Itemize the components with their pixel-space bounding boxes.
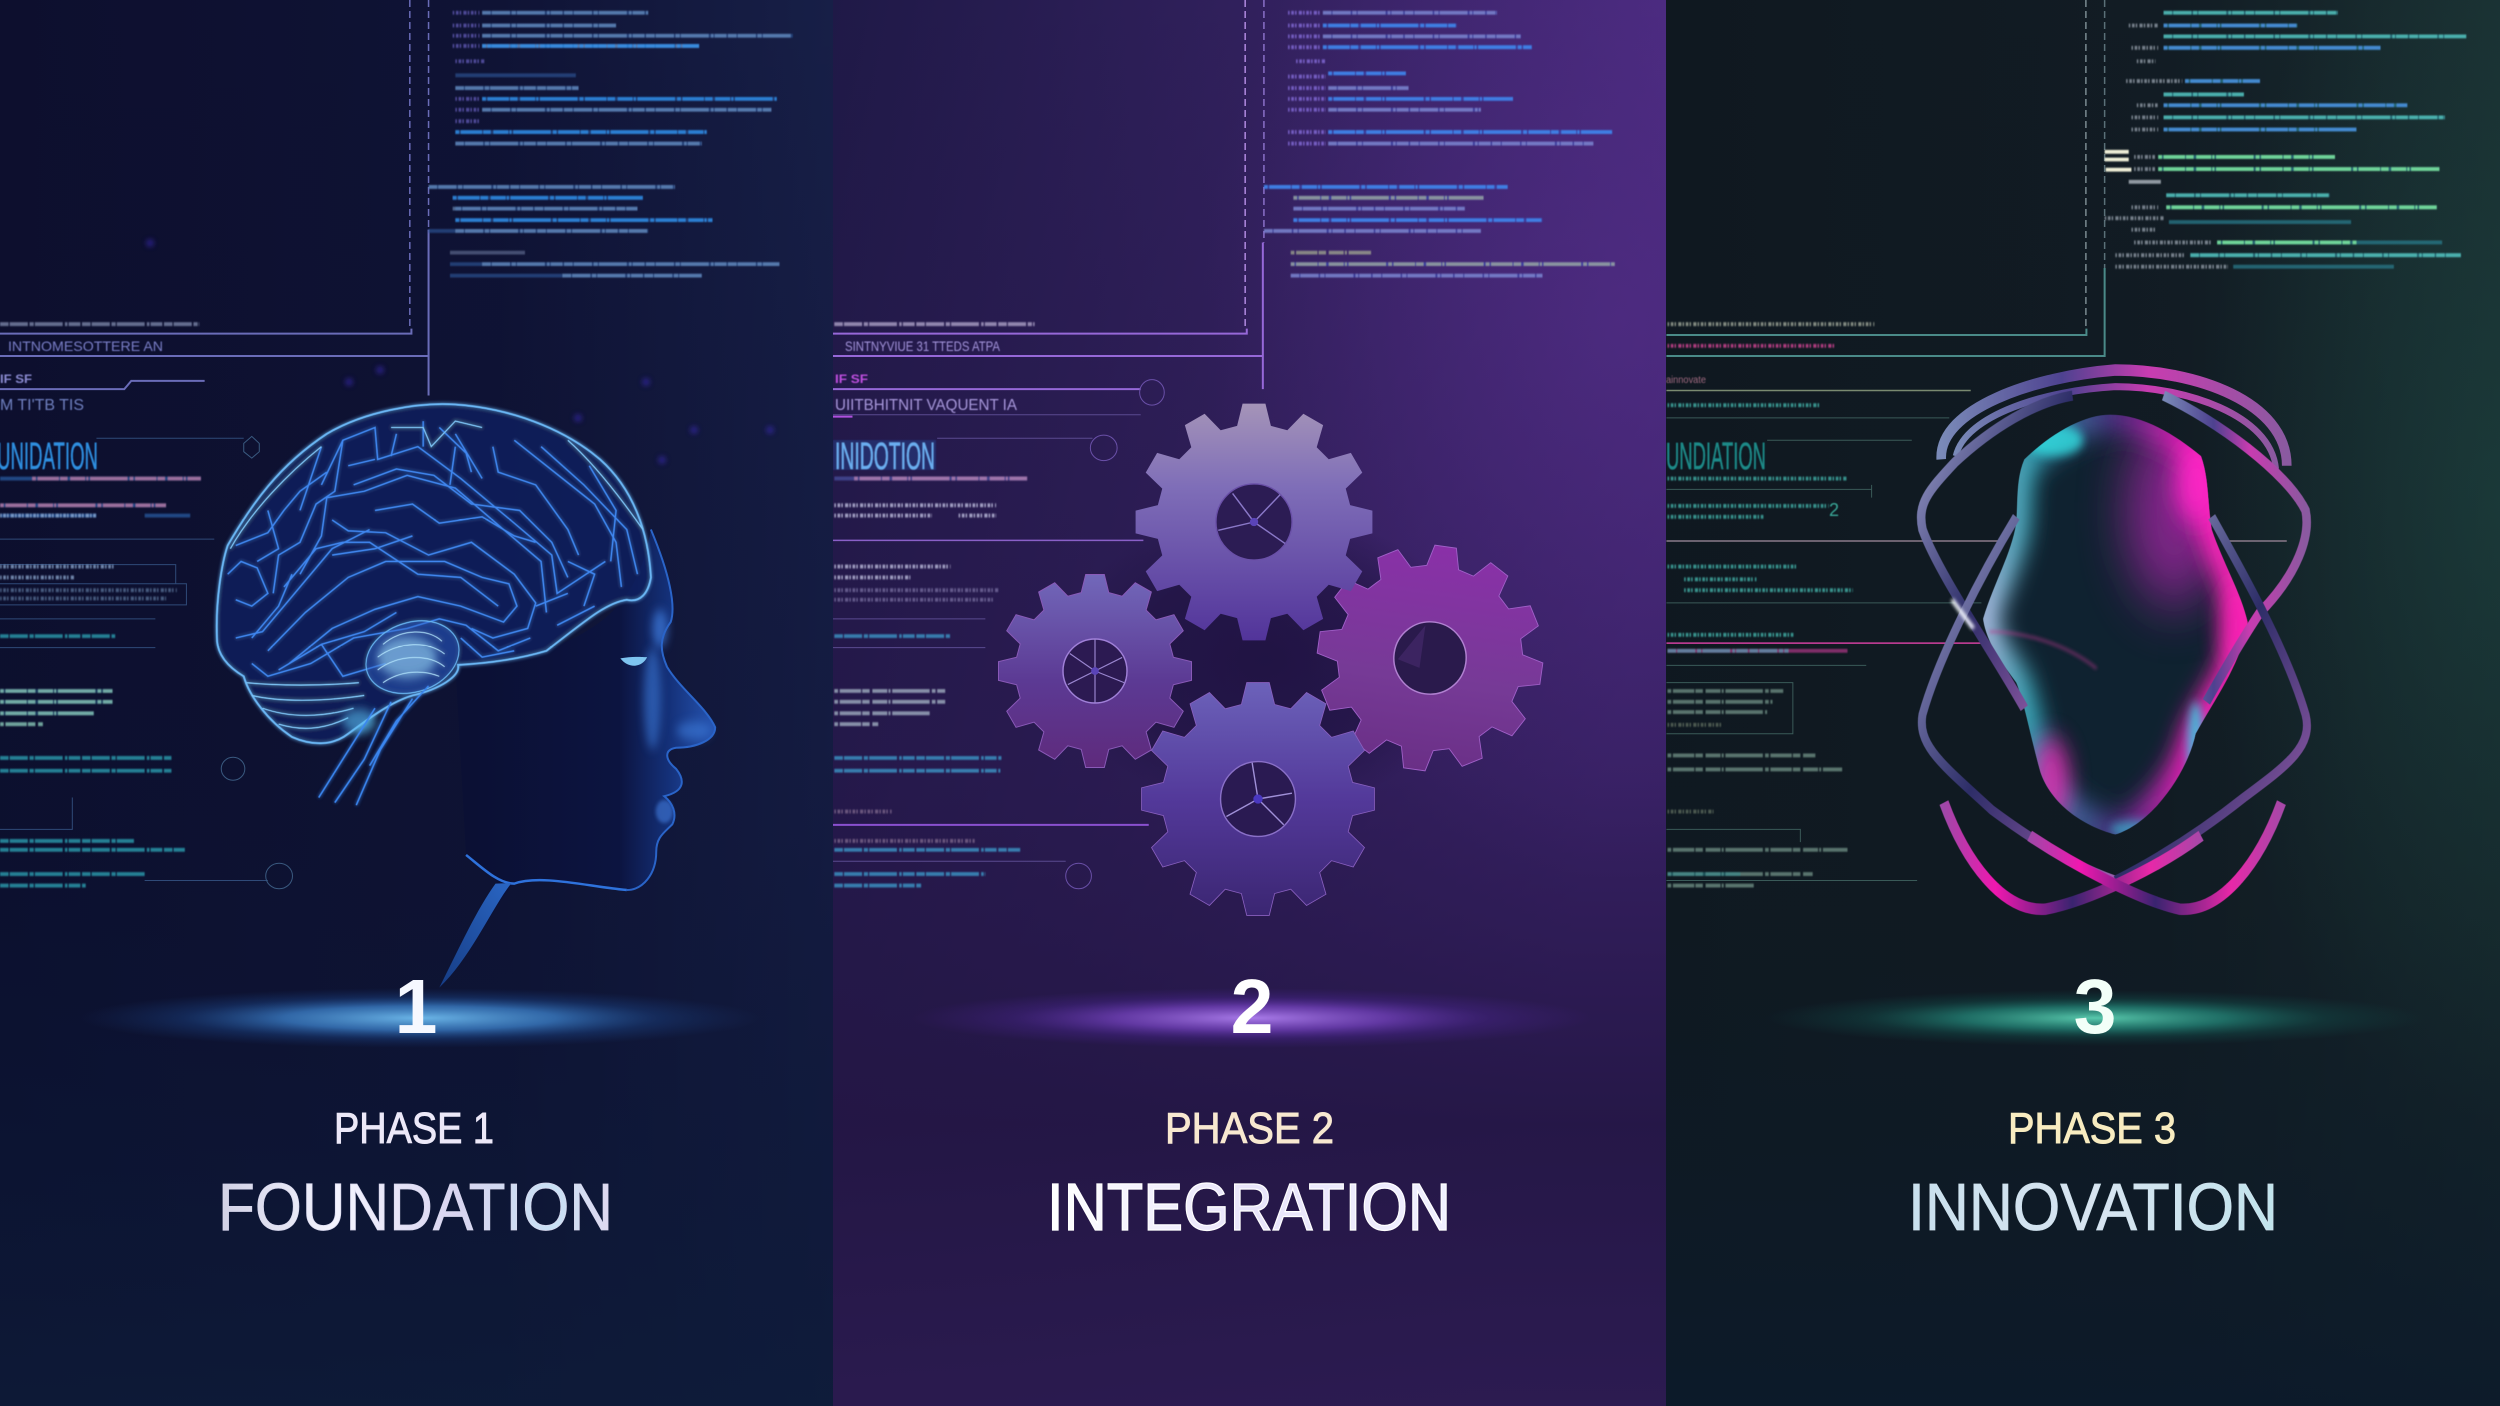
orbit rings behind orb [1941,370,2287,469]
panel: phase 2 integration [833,0,1666,1406]
code text streaks, left [0,324,201,886]
interface frame lines [1666,0,2287,880]
gear: left [998,574,1192,768]
numeral 1: 1 [395,964,437,1050]
code text streaks, top right [429,13,793,276]
numeral 2: 2 [1231,964,1273,1050]
title: innovation: INNOVATION [1908,1170,2278,1245]
interface labels: M TI'TB TIS [0,397,84,414]
orbit rings in front [1921,396,2307,909]
panel: phase 1 foundation [0,0,833,1406]
interface labels: INTNOMESOTTERE AN [8,338,163,354]
interface labels: ainnovate [1666,375,1706,386]
icon: head in profile with glowing brain [217,404,715,988]
title: integration: INTEGRATION [1047,1170,1451,1245]
phase label 3: PHASE 3 [2008,1104,2176,1153]
title: foundation: FOUNDATION [218,1170,613,1245]
interface labels [0,338,163,478]
base glow: phase 2 [912,988,1592,1048]
interface frame lines [0,0,429,889]
interface frame lines [833,0,1264,889]
interface labels: IF SF [835,372,868,386]
gear: right [1316,544,1544,772]
code text streaks, top right [1264,13,1615,276]
panel: phase 3 innovation [1666,0,2500,1406]
base glow: phase 1 [108,990,729,1046]
code text streaks, left [1667,324,1874,886]
icon: liquid orb with orbit rings [1921,370,2307,909]
gear: top [1136,404,1372,640]
interface labels: INIDOTION [835,436,935,478]
code text streaks, left [834,324,1035,886]
phase label 2: PHASE 2 [1165,1104,1334,1153]
base glow: phase 3 [1765,990,2425,1046]
code text streaks, top right [2105,13,2466,267]
gear: bottom [1142,683,1374,915]
phase label 1: PHASE 1 [334,1104,494,1153]
particles [147,240,773,463]
interface labels: 2 [1829,500,1839,520]
interface labels [833,338,1017,478]
brain [217,404,651,805]
numeral 3: 3 [2074,964,2116,1050]
head silhouette [439,530,715,988]
interface labels: SINTNYVIUE 31 TTEDS ATPA [845,338,1001,354]
interface labels: UNIDATION [0,436,98,478]
shadow behind gears [1147,550,1388,756]
interface labels: IF SF [0,372,32,386]
interface labels: UNDIATION [1666,436,1766,478]
interface labels: UIITBHITNIT VAQUENT IA [835,397,1017,414]
orb body [1976,408,2255,842]
icon: gear cluster [998,404,1557,915]
interface labels [1666,375,1839,520]
